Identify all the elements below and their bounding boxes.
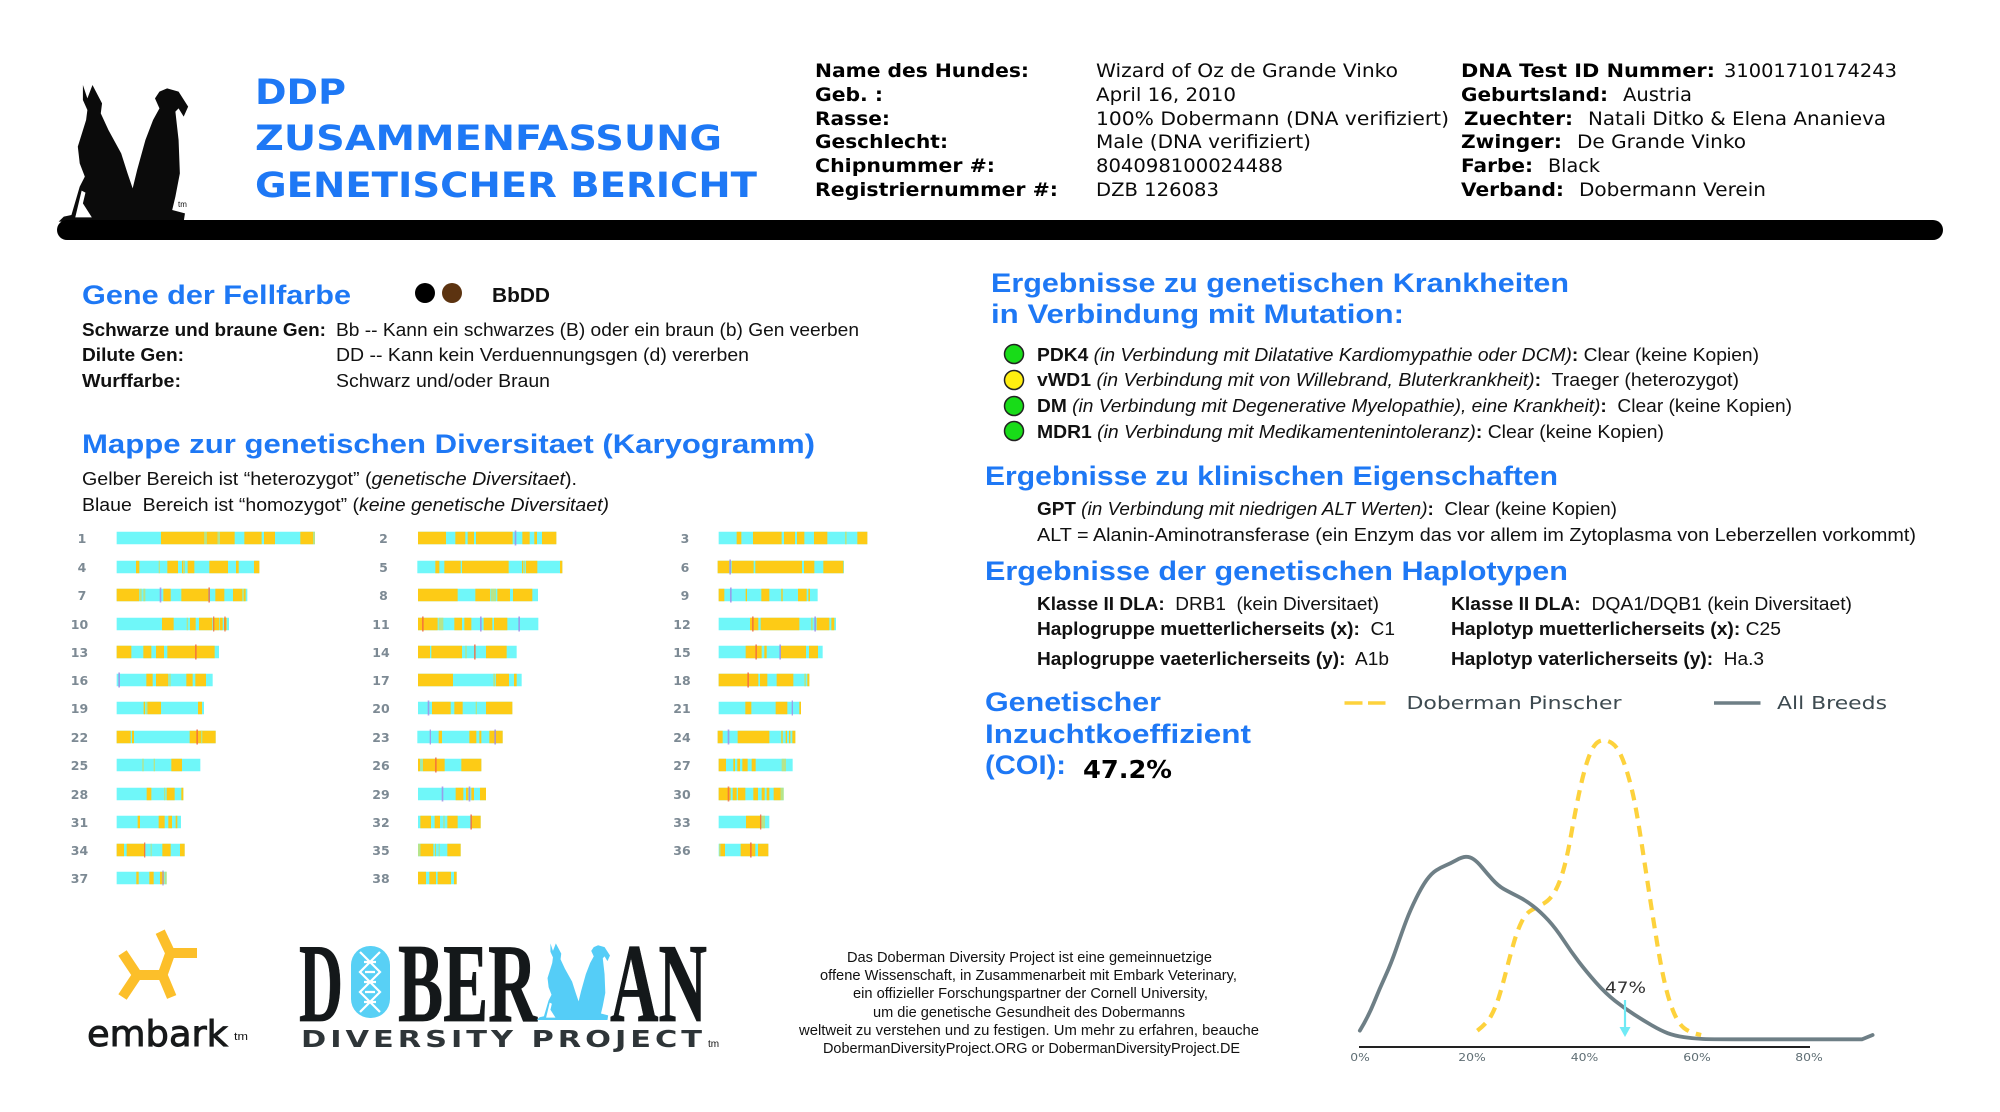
chart: chromosome bars column 2 [417, 538, 562, 878]
axis labels [1350, 1052, 1823, 1064]
coat colour details: Schwarze und braune Gen: [82, 319, 326, 340]
chart: chromosome labels: 13 [71, 645, 88, 660]
chart: chromosome labels: 15 [673, 645, 691, 660]
chart: chromosome labels: 3 [681, 531, 689, 546]
registration details [1461, 60, 1897, 201]
coat colour details [82, 319, 859, 391]
letters BER: BER [398, 922, 538, 1046]
curve: All Breeds [1360, 857, 1873, 1039]
heading: Ergebnisse zu genetischen Krankheiten [991, 268, 1569, 329]
coat colour details: Bb -- Kann ein schwarzes (B) oder ein braun (b) Gen veerben [336, 319, 859, 340]
header bar [57, 220, 1943, 240]
dog identity labels: Chipnummer #: [815, 155, 995, 177]
heading: Genetischer Inzuchtkoeffizient: Genetischer [985, 687, 1162, 717]
wordmark: embark [87, 1014, 228, 1055]
coat colour details: Dilute Gen: [82, 344, 184, 365]
chart: chromosome labels: 14 [372, 645, 390, 660]
chart: chromosome labels: 17 [372, 673, 390, 688]
heading: Mappe zur genetischen Diversitaet: Mappe zur genetischen Diversitaet (Karyogramm) [82, 429, 815, 459]
chart legend: Doberman Pinscher [1406, 694, 1622, 714]
registration details: Farbe: [1461, 155, 1533, 177]
clinical trait details: GPT (in Verbindung mit niedrigen ALT Werten) : Clear (keine Kopien) [1037, 498, 1617, 519]
chart: chromosome labels: 4 [78, 560, 87, 575]
dog identity labels: Rasse: [815, 108, 890, 130]
dog identity values: DZB 126083 [1096, 179, 1219, 201]
axis labels: 20% [1458, 1052, 1486, 1064]
dog identity values: Male (DNA verifiziert) [1096, 131, 1311, 153]
chart: chromosome labels: 22 [71, 730, 88, 745]
marker label 47%: 47% [1605, 978, 1646, 997]
chart: chromosome labels: 30 [673, 787, 691, 802]
chart: chromosome labels: 10 [71, 617, 88, 632]
dog identity values: Wizard of Oz de Grande Vinko [1096, 60, 1398, 82]
letter D: D [299, 922, 343, 1046]
haplotype details right [1451, 593, 1852, 669]
dog identity labels: Geb. : [815, 84, 883, 106]
status: vWD1 carrier: vWD1 (in Verbindung mit von Willebrand, Bluterkrankheit) : Traeger (heterozygot) [1037, 369, 1739, 390]
axis labels: 0% [1350, 1052, 1370, 1064]
registration details: Geburtsland: [1461, 84, 1608, 106]
chart: chromosome labels [71, 531, 691, 886]
heading: Genetischer Inzuchtkoeffizient: (COI): [985, 750, 1066, 780]
haplotype details right: Haplotyp vaterlicherseits (y): Ha.3 [1451, 648, 1764, 669]
chart: chromosome labels: 25 [71, 758, 88, 773]
haplotype details right: Klasse II DLA: DQA1/DQB1 (kein Diversitaet) [1451, 593, 1852, 614]
chart: chromosome labels: 32 [372, 815, 390, 830]
icon: dog silhouette logo: tm [178, 200, 187, 209]
footer text block: Das Doberman Diversity Project ist eine gemeinnuetzige [847, 950, 1212, 966]
haplotype details left [1037, 593, 1395, 669]
chart: chromosome labels: 27 [673, 758, 691, 773]
chart: chromosome labels: 1 [78, 531, 86, 546]
icon: dog silhouette logo [59, 85, 188, 222]
panel: clinical traits [985, 461, 1916, 545]
footer text block: offene Wissenschaft, in Zusammenarbeit mit Embark Veterinary, [820, 968, 1237, 984]
dog identity labels: Registriernummer #: [815, 179, 1058, 201]
x axis [1359, 1046, 1810, 1048]
chart: chromosome labels: 18 [673, 673, 691, 688]
title [255, 73, 757, 206]
status: PDK4 clear: PDK4 (in Verbindung mit Dilatative Kardiomypathie oder DCM) : Clear (keine Kopien) [1037, 344, 1759, 365]
chart: chromosome labels: 38 [372, 871, 390, 886]
heading: Gene der Fellfarbe: Gene der Fellfarbe [82, 280, 351, 310]
coat colour details: Wurffarbe: [82, 370, 181, 391]
COI value: 47.2% [1083, 755, 1172, 784]
haplotype details left: Haplogruppe vaeterlicherseits (y): A1b [1037, 648, 1389, 669]
chart: chromosome labels: 33 [673, 815, 691, 830]
icon: DNA capsule [351, 946, 390, 1018]
chart: chromosome labels: 19 [71, 701, 88, 716]
wordmark: Diversity Project: DIVERSITY PROJECT [301, 1027, 706, 1053]
coat colour details: DD -- Kann kein Verduennungsgen (d) vererben [336, 344, 749, 365]
heading: Genetischer Inzuchtkoeffizient [985, 687, 1251, 780]
clinical trait details [1037, 498, 1916, 545]
chart legend: All Breeds [1777, 694, 1887, 714]
dog identity labels [815, 60, 1058, 201]
registration details: Black [1548, 155, 1600, 177]
dog identity values: 804098100024488 [1096, 155, 1283, 177]
panel: karyogram [71, 429, 867, 886]
registration details: Dobermann Verein [1579, 179, 1766, 201]
clinical trait details: ALT = Alanin-Aminotransferase (ein Enzym das vor allem im Zytoplasma von Leberzellen vorkommt) [1037, 524, 1916, 545]
heading: Ergebnisse zu klinischen Eigenschaften: Ergebnisse zu klinischen Eigenschaften [985, 461, 1558, 491]
dog identity values [1096, 60, 1449, 201]
karyogram legend text [82, 468, 609, 515]
heading: Ergebnisse zu genetischen Krankheiten: Ergebnisse zu genetischen Krankheiten [991, 268, 1569, 298]
logo: embark [87, 932, 248, 1055]
chart: chromosome labels: 35 [372, 843, 390, 858]
genotype: BbDD [492, 285, 550, 307]
chart: chromosome labels: 20 [372, 701, 390, 716]
chart: chromosome labels: 37 [71, 871, 88, 886]
panel: haplotypes [985, 556, 1852, 669]
registration details: Verband: [1461, 179, 1564, 201]
chart: chromosome labels: 6 [681, 560, 690, 575]
chart: chromosome labels: 8 [379, 588, 388, 603]
icon: embark mark [122, 932, 197, 997]
chart: chromosome labels: 28 [71, 787, 88, 802]
registration details: Zwinger: [1461, 131, 1562, 153]
title: GENETISCHER BERICHT [255, 166, 757, 206]
status: MDR1 clear: MDR1 (in Verbindung mit Medikamentenintoleranz) : Clear (keine Kopien) [1037, 421, 1664, 442]
header panel [57, 60, 1943, 240]
footer text block: DobermanDiversityProject.ORG or DobermanDiversityProject.DE [823, 1041, 1240, 1057]
chart: chromosome labels: 36 [673, 843, 691, 858]
coat colour details: Schwarz und/oder Braun [336, 370, 550, 391]
panel: genetic disease results [991, 268, 1792, 442]
heading: Ergebnisse der genetischen Haplotypen: Ergebnisse der genetischen Haplotypen [985, 556, 1568, 586]
chart: COI distribution [1350, 740, 1873, 1064]
icon: black and brown allele dots [415, 283, 462, 303]
chart: chromosome labels: 9 [681, 588, 689, 603]
registration details: De Grande Vinko [1577, 131, 1746, 153]
title: DDP [255, 73, 346, 113]
dog identity labels: Geschlecht: [815, 131, 948, 153]
icon: blue dog silhouette [537, 943, 610, 1020]
chart: chromosome labels: 16 [71, 673, 88, 688]
arrow: dog's COI marker [1620, 1000, 1630, 1037]
chart: chromosome labels: 21 [673, 701, 691, 716]
footer text block: um die genetische Gesundheit des Dobermanns [873, 1005, 1185, 1021]
registration details: 31001710174243 [1724, 60, 1897, 82]
logo: Doberman Diversity Project: tm [708, 1039, 719, 1050]
karyogram legend text: Blaue Bereich ist “homozygot” ( keine genetische Diversitaet) [82, 494, 609, 515]
footer text block [798, 950, 1259, 1057]
logo: Doberman Diversity Project [299, 922, 719, 1053]
chart: chromosome labels: 5 [379, 560, 388, 575]
axis labels: 60% [1683, 1052, 1711, 1064]
chart: chromosome labels: 23 [372, 730, 390, 745]
chart: chromosome labels: 31 [71, 815, 88, 830]
footer text block: ein offizieller Forschungspartner der Cornell University, [853, 986, 1208, 1002]
chart: chromosome labels: 26 [372, 758, 390, 773]
footer text block: weltweit zu verstehen und zu festigen. Um mehr zu erfahren, beauche [798, 1023, 1259, 1039]
chart: chromosome labels: 34 [71, 843, 88, 858]
chart: chromosome labels: 12 [673, 617, 691, 632]
chart: chromosome labels: 2 [379, 531, 388, 546]
axis labels: 80% [1795, 1052, 1823, 1064]
status: DM clear: DM (in Verbindung mit Degenerative Myelopathie), eine Krankheit) : Clear (keine Kopien) [1037, 395, 1792, 416]
panel: coefficient of inbreeding [985, 687, 1887, 1064]
registration details: DNA Test ID Nummer: [1461, 60, 1715, 82]
letters AN: AN [610, 922, 707, 1046]
chart: chromosome bars column 1 [117, 538, 315, 878]
dog identity values: April 16, 2010 [1096, 84, 1236, 106]
title: ZUSAMMENFASSUNG [255, 119, 722, 159]
panel: coat colour genes [82, 280, 859, 391]
curve: Doberman Pinscher [1477, 740, 1701, 1035]
chart: chromosome labels: 24 [673, 730, 691, 745]
heading: Ergebnisse zu genetischen Krankheiten: in Verbindung mit Mutation: [991, 299, 1404, 329]
chart: chromosome labels: 7 [78, 588, 86, 603]
dog identity labels: Name des Hundes: [815, 60, 1029, 82]
registration details: Austria [1623, 84, 1692, 106]
chart: chromosome labels: 11 [372, 617, 390, 632]
karyogram legend text: Gelber Bereich ist “heterozygot” ( genetische Diversitaet ). [82, 468, 577, 489]
haplotype details left: Klasse II DLA: DRB1 (kein Diversitaet) [1037, 593, 1379, 614]
chart legend [1344, 694, 1887, 714]
registration details: Zuechter: [1464, 108, 1573, 130]
haplotype details right: Haplotyp muetterlicherseits (x): C25 [1451, 618, 1781, 639]
chart: chromosome bars column 3 [718, 538, 867, 850]
dog identity values: 100% Dobermann (DNA verifiziert) [1096, 108, 1449, 130]
haplotype details left: Haplogruppe muetterlicherseits (x): C1 [1037, 618, 1395, 639]
logo: embark: tm [234, 1031, 248, 1043]
registration details: Natali Ditko & Elena Ananieva [1588, 108, 1886, 130]
chart: chromosome labels: 29 [372, 787, 390, 802]
axis labels: 40% [1571, 1052, 1598, 1064]
heading: Genetischer Inzuchtkoeffizient: Inzuchtkoeffizient [985, 719, 1251, 749]
